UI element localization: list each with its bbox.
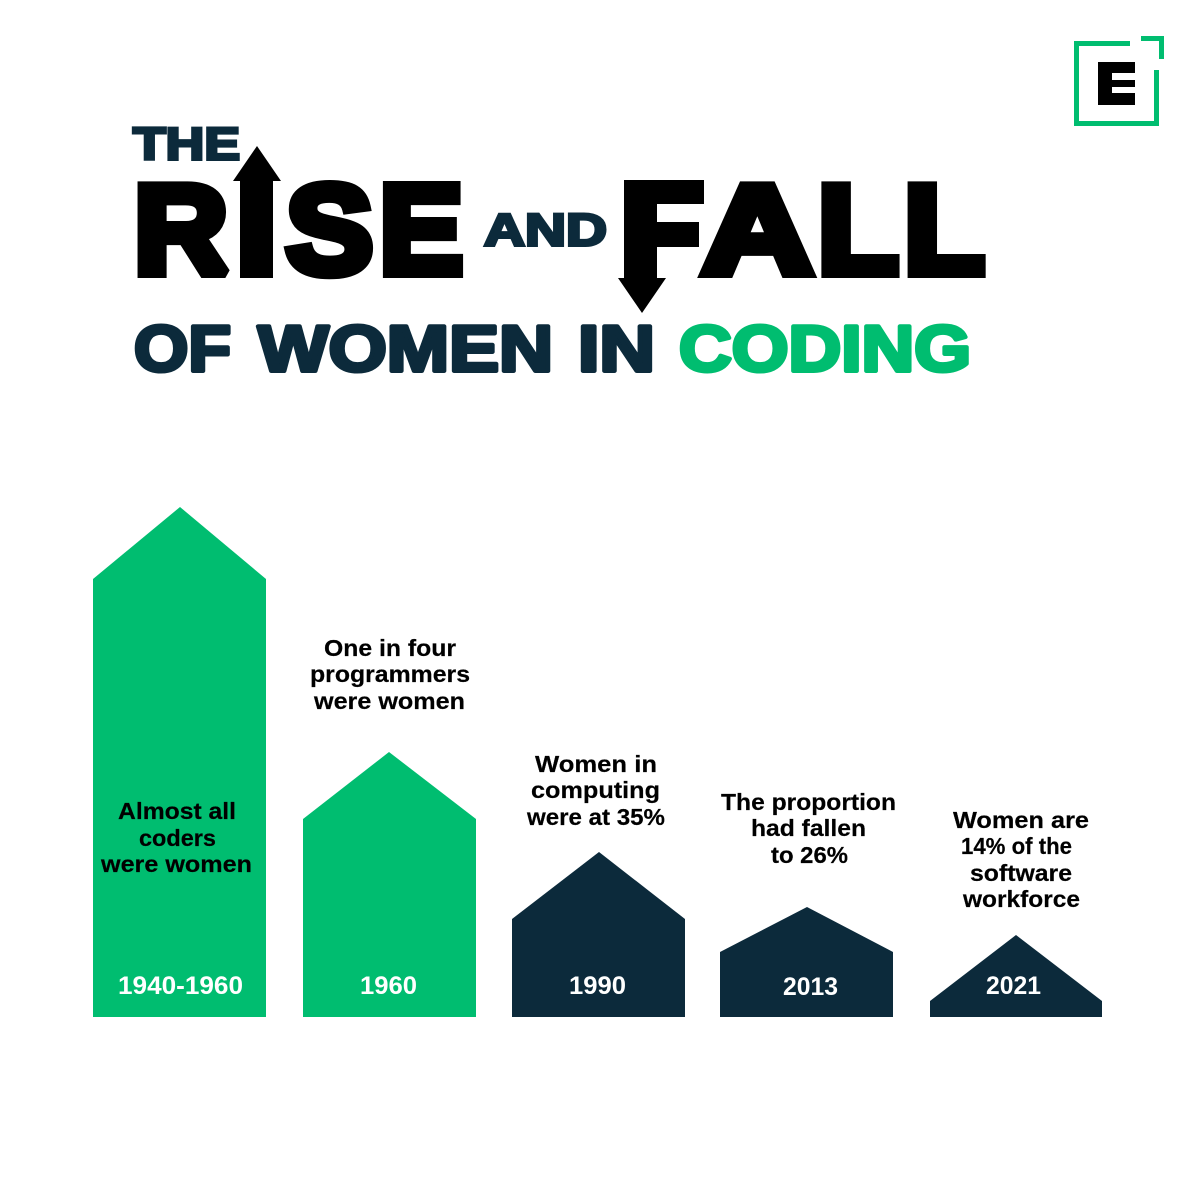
caption: women in computing xyxy=(526,751,665,830)
caption: proportion fallen xyxy=(721,789,896,868)
caption: software workforce: software xyxy=(970,860,1072,886)
caption: one in four: programmers xyxy=(310,661,470,687)
caption: one in four: One in four xyxy=(324,635,456,661)
title line: OF WOMEN IN: OF xyxy=(134,312,231,385)
title word: FALL with down arrow: L xyxy=(904,159,984,300)
caption: software workforce xyxy=(953,807,1089,912)
caption: one in four xyxy=(310,635,470,714)
title word: RISE with up arrow: R xyxy=(134,159,228,300)
caption: women in computing: were at 35% xyxy=(526,804,665,830)
year label: 2013 xyxy=(783,973,838,1001)
logo xyxy=(1074,36,1164,126)
bar: 1990 xyxy=(512,751,685,1017)
year label: 1990 xyxy=(569,972,626,1000)
caption: proportion fallen: The proportion xyxy=(721,789,896,815)
caption: women in computing: computing xyxy=(531,777,660,803)
title word: FALL with down arrow xyxy=(618,159,984,313)
bar: 1960 xyxy=(303,635,476,1017)
caption: software workforce: workforce xyxy=(962,886,1080,912)
year label: 1960 xyxy=(360,972,417,1000)
title word: THE: THE xyxy=(133,118,240,170)
bar: 1940-1960 xyxy=(93,507,266,1017)
title word: RISE with up arrow: E xyxy=(380,159,463,300)
year label: 1940-1960 xyxy=(118,972,243,1000)
title xyxy=(133,118,984,385)
title line: OF WOMEN IN xyxy=(134,312,655,385)
title word: RISE with up arrow: S xyxy=(286,159,373,300)
caption: women in computing: Women in xyxy=(535,751,657,777)
title line: OF WOMEN IN: IN xyxy=(578,312,655,385)
title word: RISE with up arrow xyxy=(134,146,463,300)
title word: FALL with down arrow: L xyxy=(818,159,898,300)
caption: almost all coders xyxy=(100,798,252,877)
title word: AND: AND xyxy=(484,204,607,256)
caption: proportion fallen: to 26% xyxy=(771,842,848,868)
caption: software workforce: 14% of the xyxy=(961,833,1072,859)
year label: 2021 xyxy=(986,972,1041,1000)
caption: software workforce: Women are xyxy=(953,807,1089,833)
bar: 2013 xyxy=(720,789,896,1017)
title word: FALL with down arrow: A xyxy=(702,159,813,300)
caption: proportion fallen: had fallen xyxy=(751,815,866,841)
caption: one in four: were women xyxy=(313,688,465,714)
title word: CODING: CODING xyxy=(679,312,971,385)
caption: almost all coders: Almost all xyxy=(118,798,236,824)
bar: 2021 xyxy=(930,807,1102,1017)
caption: almost all coders: were women xyxy=(100,851,252,877)
title line: OF WOMEN IN: WOMEN xyxy=(258,312,553,385)
caption: almost all coders: coders xyxy=(139,825,216,851)
